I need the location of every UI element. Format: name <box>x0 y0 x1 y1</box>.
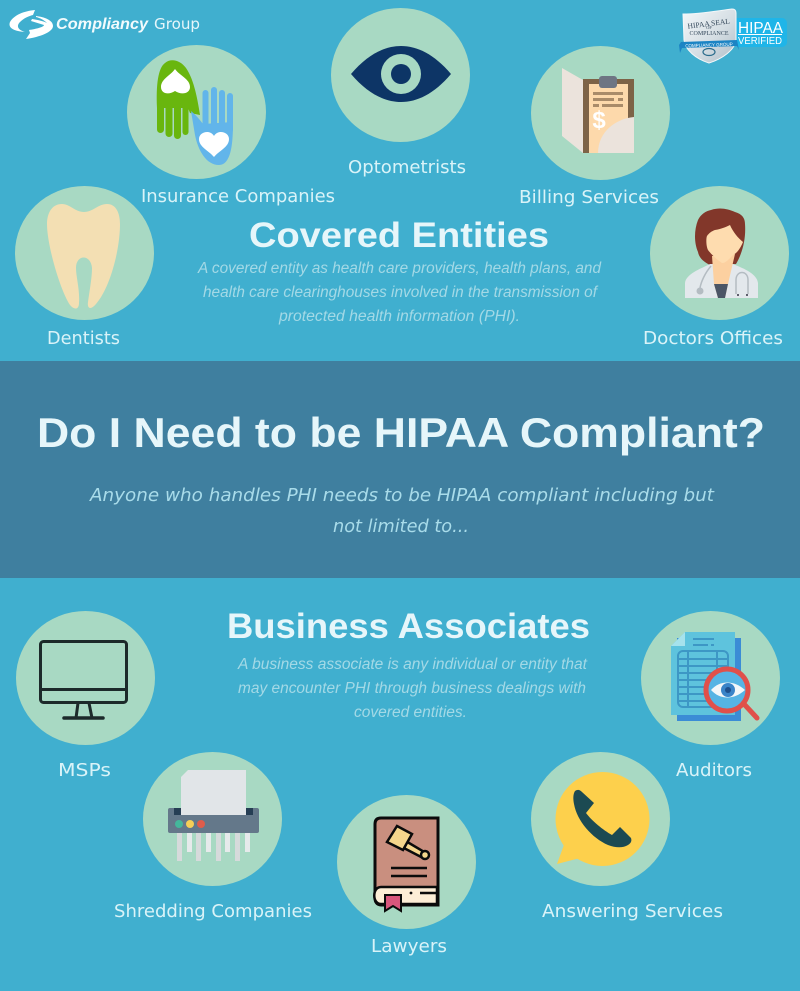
icon: phone speech bubble <box>531 752 670 886</box>
subtitle: Anyone who handles PHI needs to be HIPAA compliant including but <box>89 485 715 506</box>
badge: HIPAA seal and verified: OF <box>706 25 712 30</box>
icon: insurance hands <box>127 45 266 179</box>
label: Lawyers: Lawyers <box>371 936 447 957</box>
text block: covered entity definition: protected health information (PHI). <box>278 308 520 325</box>
logo: Compliancy Group: Group <box>154 15 200 33</box>
icon: audit document and magnifier <box>641 611 780 745</box>
icon: monitor <box>16 611 155 745</box>
text block: covered entity definition: A covered entity as health care providers, health plans, and <box>197 260 602 277</box>
icon: billing clipboard <box>531 46 670 180</box>
badge: HIPAA seal and verified: COMPLIANCE <box>689 31 729 37</box>
text block: business associate definition: A business associate is any individual or entity that <box>237 656 588 673</box>
subtitle: not limited to... <box>333 516 469 537</box>
text block: covered entity definition: health care clearinghouses involved in the transmission of <box>203 284 599 301</box>
logo: Compliancy Group: Compliancy <box>56 16 149 33</box>
logo: Compliancy Group <box>10 10 200 39</box>
icon: doctor <box>650 186 789 320</box>
icon: eye <box>331 8 470 142</box>
panel: central question band <box>0 361 800 578</box>
heading: Business Associates: Business Associates <box>227 607 590 646</box>
title: Do I Need to be HIPAA Compliant? <box>37 409 765 456</box>
icon: tooth <box>15 186 154 320</box>
heading: Covered Entities: Covered Entities <box>249 216 549 255</box>
label: Doctors Offices: Doctors Offices <box>643 328 783 349</box>
label: MSPs: MSPs <box>58 760 111 781</box>
label: Insurance Companies: Insurance Companies <box>141 186 335 207</box>
text block: business associate definition: may encounter PHI through business dealings with <box>238 680 586 697</box>
badge: HIPAA seal and verified: COMPLIANCY GROUP <box>685 42 733 48</box>
text block: covered entity definition <box>197 260 602 325</box>
label: Shredding Companies: Shredding Companies <box>114 901 312 922</box>
badge: HIPAA seal and verified <box>679 9 787 63</box>
subtitle <box>89 485 715 537</box>
label: Auditors: Auditors <box>676 760 752 781</box>
text block: business associate definition <box>237 656 588 721</box>
icon: billing clipboard: $ <box>592 107 606 134</box>
badge: HIPAA seal and verified: VERIFIED <box>738 35 782 47</box>
badge: HIPAA seal and verified: HIPAA SEAL <box>687 16 731 31</box>
badge: HIPAA seal and verified: HIPAA <box>738 20 784 37</box>
label: Billing Services: Billing Services <box>519 187 659 208</box>
label: Dentists: Dentists <box>47 328 120 349</box>
label: Optometrists: Optometrists <box>348 157 466 178</box>
icon: shredder <box>143 752 282 886</box>
icon: law book <box>337 795 476 929</box>
text block: business associate definition: covered entities. <box>354 704 467 721</box>
label: Answering Services: Answering Services <box>542 901 723 922</box>
